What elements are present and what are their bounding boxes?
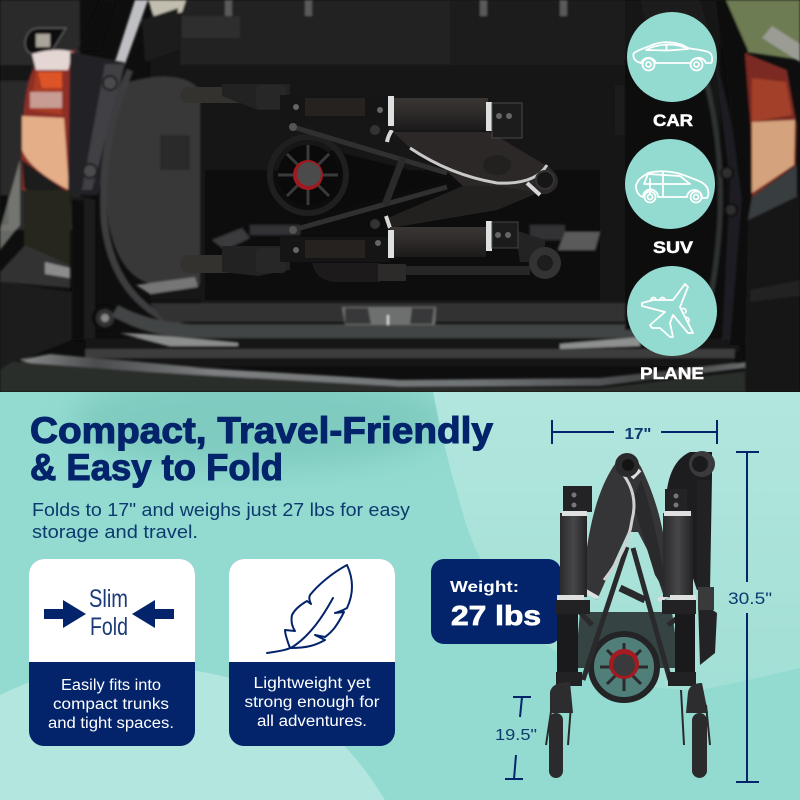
caption: lightweight [244, 675, 380, 730]
upper stroller bar [180, 84, 522, 138]
folded seat [583, 453, 670, 600]
caption: slim fold: and tight spaces. [48, 715, 174, 732]
folded seat fabric [386, 130, 558, 228]
folding frame arms [289, 123, 447, 234]
dimension: 19.5 inches: 19.5" [495, 727, 537, 744]
callout: weight badge [431, 559, 561, 644]
dimension: width 17 inches [552, 420, 717, 444]
text block: description: Folds to 17" and weighs just 27 lbs for easy [32, 499, 411, 520]
text block: description: storage and travel. [32, 521, 198, 542]
panel: slim fold card [29, 559, 195, 746]
lower stroller bar [180, 221, 518, 276]
dimension: height 30.5 inches: 30.5" [728, 589, 772, 608]
caption: slim fold: Easily fits into [61, 677, 161, 694]
caption: lightweight: strong enough for [244, 694, 380, 711]
icon: feather [267, 565, 352, 653]
panel: teal lower background [0, 370, 800, 800]
caption: slim fold: compact trunks [53, 696, 169, 713]
caption: slim fold [48, 677, 174, 732]
heading [30, 410, 493, 488]
icon: plane badge [627, 266, 717, 356]
panel: lightweight card [229, 559, 395, 746]
A-frame [578, 547, 688, 680]
label: SUV: SUV [653, 238, 694, 257]
right side frame [662, 489, 710, 778]
panel: car trunk photo [0, 0, 800, 392]
callout: weight badge: 27 lbs [451, 600, 541, 631]
centre wheel [591, 634, 657, 700]
folding frame shadow [330, 150, 450, 212]
icon: SUV badge [625, 139, 715, 229]
drive structure behind frame [575, 612, 680, 668]
rear frame and lower fabric [666, 451, 717, 665]
dimension: 19.5 inches [495, 697, 537, 779]
callout: weight badge: Weight: [450, 579, 519, 596]
dimension: height 30.5 inches [728, 452, 772, 782]
folded stroller in trunk [180, 84, 561, 282]
heading: Compact, Travel-Friendly [30, 410, 493, 451]
caption: lightweight: Lightweight yet [254, 675, 371, 692]
rear wheel [270, 137, 346, 213]
label: car: CAR [653, 111, 693, 130]
icon: car badge [627, 12, 717, 102]
icon: slim fold arrows: Slim [89, 585, 128, 613]
label: plane: PLANE [640, 364, 704, 383]
upright folded stroller [546, 451, 717, 778]
dimension: width 17 inches: 17" [624, 426, 652, 443]
lower rear fabric and rail [312, 230, 561, 282]
icon: slim fold arrows [44, 585, 174, 641]
heading: & Easy to Fold [30, 447, 283, 488]
icon: slim fold arrows: Fold [90, 613, 128, 641]
text block: description [32, 499, 411, 542]
left side frame [546, 486, 592, 778]
caption: lightweight: all adventures. [257, 713, 367, 730]
